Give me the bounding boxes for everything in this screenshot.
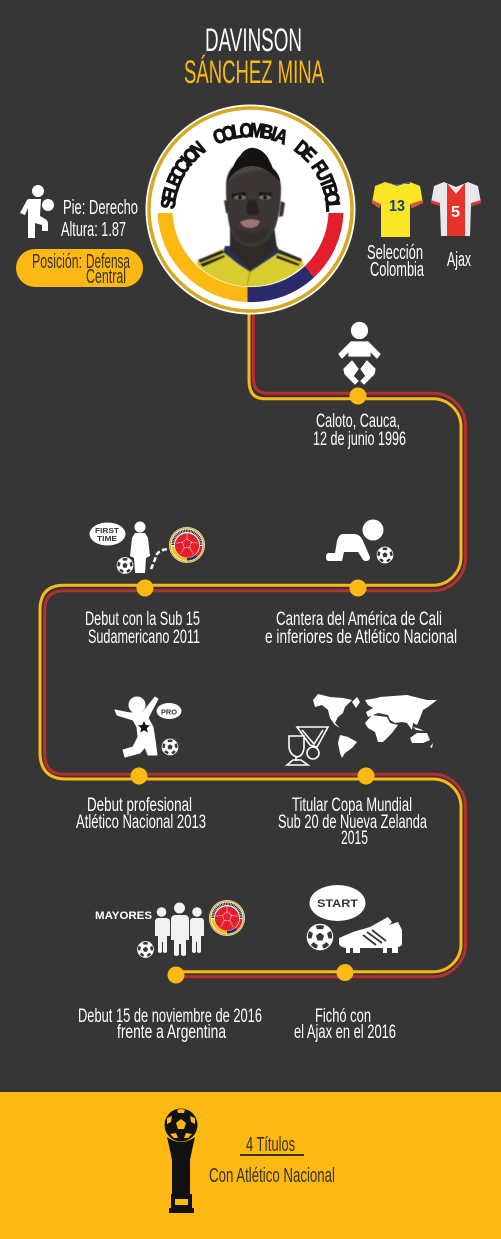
- text: world cup caption: 2015: [341, 828, 368, 849]
- icon: first time bubble: [90, 522, 126, 546]
- text: senior debut caption: Debut 15 de noviembre de 2016: [78, 1006, 262, 1027]
- text: Ajax caption: el Ajax en el 2016: [294, 1022, 396, 1043]
- crest lettering: O: [320, 190, 345, 207]
- text: shirt labels: Ajax: [447, 249, 471, 271]
- milestone: senior debut: [78, 900, 262, 1043]
- icon: ball: [377, 547, 393, 563]
- portrait: [196, 148, 304, 286]
- crest lettering: L: [322, 200, 345, 213]
- crest lettering: C: [165, 162, 191, 184]
- crest arcs: [158, 213, 344, 302]
- icon: ball: [117, 557, 133, 574]
- icon: crawling baby: [326, 520, 384, 561]
- crest lettering: O: [219, 120, 238, 146]
- text: shirt labels: Selección: [367, 242, 423, 264]
- text: professional caption: Debut profesional: [87, 795, 192, 816]
- text: Ajax caption: [294, 1006, 396, 1043]
- text: Ajax caption: Fichó con: [315, 1006, 371, 1027]
- text: under-15 caption: Debut con la Sub 15: [85, 609, 200, 630]
- crest lettering: [156, 118, 345, 213]
- icon: start bubble: [310, 885, 366, 921]
- text: titles count: 4 Títulos: [246, 1134, 295, 1156]
- text: mayores label: MAYORES: [95, 910, 152, 922]
- text: senior debut caption: frente a Argentina: [117, 1022, 226, 1043]
- position pill: [16, 249, 143, 288]
- crest lettering: B: [259, 119, 275, 144]
- position pill: Central: [86, 266, 126, 288]
- crest lettering: O: [178, 143, 204, 168]
- icon: boot: [339, 917, 402, 953]
- milestone: under-15 debut: [85, 522, 205, 648]
- icon: three players: [155, 902, 204, 956]
- text: shirt labels: [367, 242, 471, 281]
- position pill: Defensa: [86, 251, 131, 273]
- icon: Colombia crest: [209, 900, 245, 936]
- crest lettering: E: [162, 170, 187, 190]
- text: professional caption: Atlético Nacional 2013: [76, 812, 206, 833]
- crest lettering: F: [307, 156, 332, 177]
- crest lettering: U: [311, 163, 337, 185]
- milestone: Ajax signing: [294, 885, 402, 1043]
- icon: Colombia shirt: [372, 182, 423, 237]
- title: SÁNCHEZ MINA: [184, 54, 324, 90]
- title: DAVINSON: [205, 22, 302, 58]
- icon: player with ball: [20, 185, 54, 238]
- icon: first time bubble: FIRST: [95, 526, 119, 535]
- crest lettering: A: [272, 123, 292, 149]
- icon: trophy and medal: [287, 727, 328, 765]
- text: academy caption: [265, 609, 457, 648]
- crest lettering: E: [297, 142, 321, 166]
- icon: person: [130, 522, 150, 573]
- icon: Colombia crest: [169, 527, 205, 563]
- crest lettering: T: [315, 173, 340, 192]
- text: senior debut caption: [78, 1006, 262, 1043]
- milestone: professional debut: [76, 696, 206, 833]
- text: birthplace: [313, 411, 406, 450]
- crest lettering: I: [269, 122, 280, 145]
- text: professional caption: [76, 795, 206, 833]
- crest lettering: O: [239, 118, 253, 142]
- panel: titles band: [0, 1092, 501, 1239]
- icon: world map: [313, 694, 437, 758]
- dashed ball path: [151, 549, 168, 569]
- icon: large ball: [307, 924, 333, 950]
- text: world cup caption: [278, 795, 427, 849]
- crest lettering: C: [209, 123, 229, 149]
- title: [184, 22, 324, 90]
- crest lettering: S: [156, 196, 180, 210]
- crest lettering: D: [290, 135, 314, 161]
- crest lettering: L: [159, 179, 184, 196]
- icon: baby: [339, 322, 380, 384]
- icon: celebrating player: [115, 696, 158, 757]
- crest lettering: N: [186, 136, 210, 162]
- text: world cup caption: Titular Copa Mundial: [292, 795, 412, 816]
- crest lettering: I: [176, 152, 196, 170]
- icon: Ajax shirt: 5: [451, 204, 460, 221]
- text: world cup caption: Sub 20 de Nueva Zelanda: [278, 812, 427, 833]
- icon: start bubble: START: [317, 898, 358, 910]
- text: foot and height: Pie: Derecho: [63, 197, 138, 219]
- crest lettering: C: [169, 155, 195, 177]
- icon: trophy: [164, 1108, 198, 1213]
- crest lettering: B: [318, 181, 343, 199]
- position pill: Posición:: [32, 251, 82, 273]
- milestone: academy: [265, 520, 457, 648]
- milestone: birth: [313, 322, 406, 450]
- icon: pro bubble: PRO: [161, 708, 177, 716]
- icon: Colombia shirt: 13: [389, 198, 405, 215]
- text: under-15 caption: [85, 609, 200, 648]
- timeline path: [40, 310, 466, 977]
- milestone: world cup: [278, 694, 437, 849]
- text: foot and height: [61, 197, 138, 241]
- crest lettering: L: [230, 119, 244, 143]
- crest lettering: M: [249, 118, 265, 142]
- badge: portrait crest: [146, 104, 356, 314]
- icon: Ajax shirt: [431, 182, 481, 236]
- crest lettering: E: [157, 187, 182, 203]
- text: under-15 caption: Sudamericano 2011: [88, 627, 200, 648]
- icon: ball: [162, 739, 178, 755]
- text: birthplace: 12 de junio 1996: [313, 429, 406, 450]
- text: birthplace: Caloto, Cauca,: [316, 411, 400, 432]
- icon: ball: [137, 941, 154, 958]
- text: foot and height: Altura: 1.87: [61, 219, 126, 241]
- text: shirt labels: Colombia: [370, 259, 425, 281]
- icon: first time bubble: TIME: [97, 534, 117, 543]
- text: club: Con Atlético Nacional: [209, 1165, 335, 1187]
